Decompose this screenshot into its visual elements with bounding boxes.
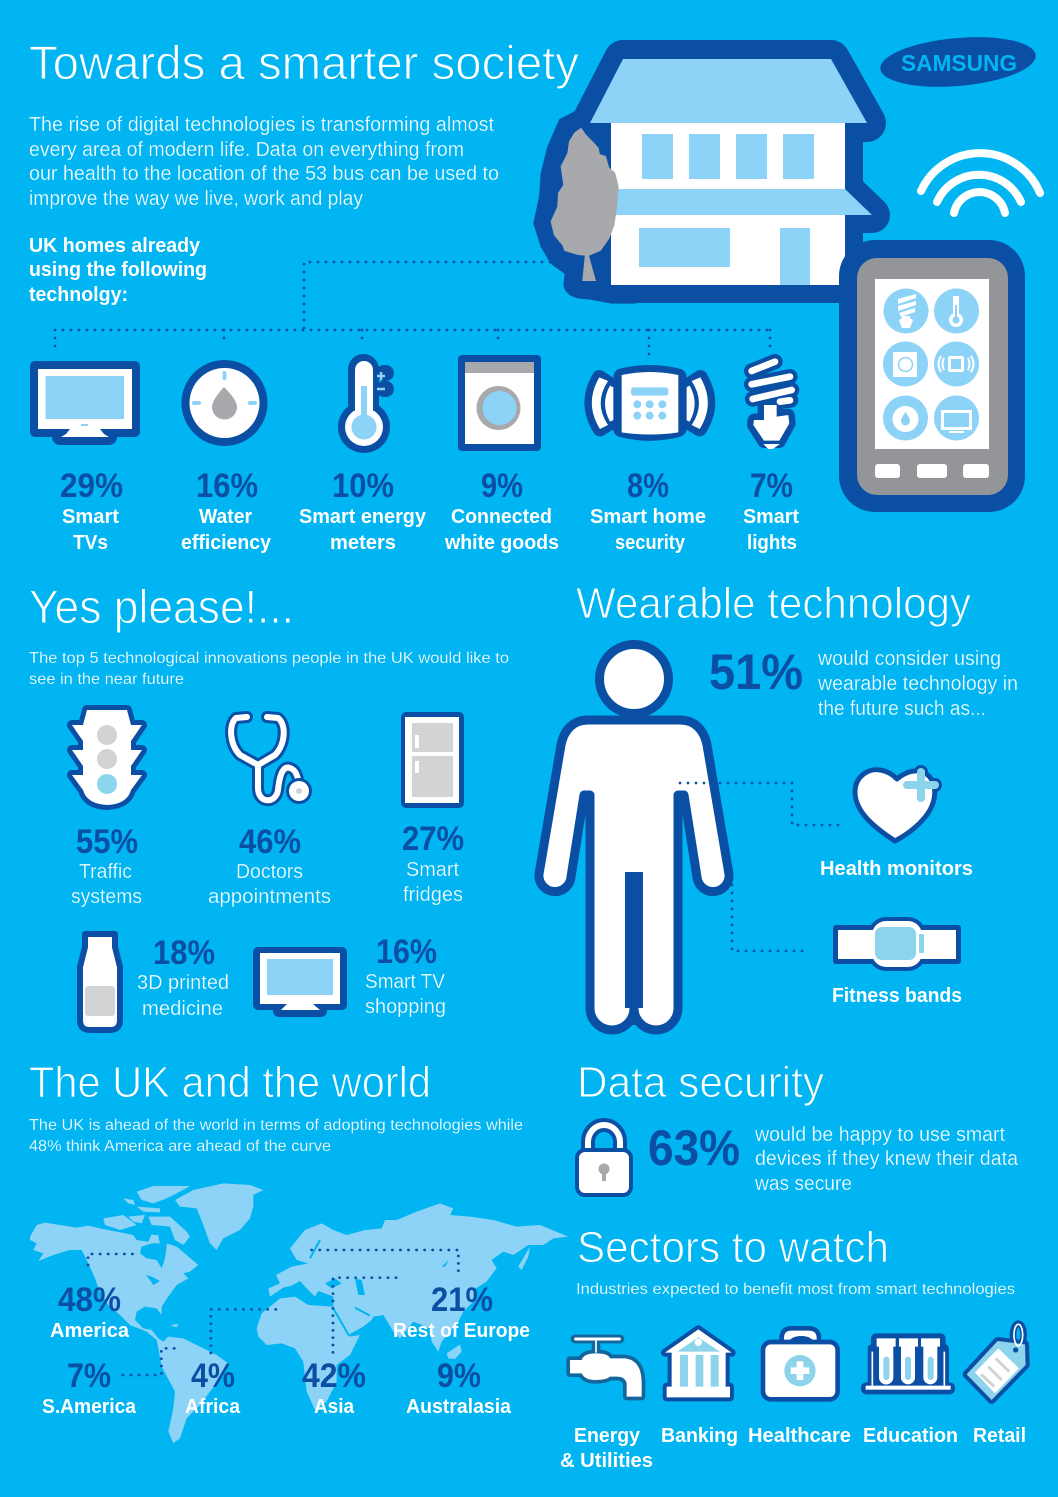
text: data security: was secure <box>754 1173 852 1195</box>
panel: Data security <box>577 1058 1019 1195</box>
logo: Samsung <box>878 31 1038 93</box>
stat: connected white goods: 9% <box>481 467 523 505</box>
stat: smart lights: lights <box>747 532 797 554</box>
stat: smart energy meters <box>299 467 427 554</box>
chart: world map <box>30 1183 568 1443</box>
stat: Australasia <box>406 1357 512 1418</box>
label: energy and utilities <box>560 1425 653 1472</box>
title: Towards a smarter society <box>29 36 579 89</box>
stat: Africa: Africa <box>185 1396 241 1418</box>
text: wearable consideration: would consider using <box>817 648 1001 670</box>
icon: traffic light <box>72 710 142 805</box>
panel: UK home technology <box>30 354 799 554</box>
heading: Data security <box>577 1058 824 1107</box>
intro text block: improve the way we live, work and play <box>29 188 363 210</box>
heading: Yes please!... <box>29 580 294 633</box>
intro text: The UK is ahead of the world in terms of adopting technologies while <box>29 1117 523 1134</box>
text: wearable consideration: wearable technology in <box>817 673 1018 695</box>
intro text block: The rise of digital technologies is transforming almost <box>29 114 494 136</box>
stat: smart home security: 8% <box>627 467 669 505</box>
intro text: Industries expected to benefit most from smart technologies <box>576 1281 1015 1298</box>
panel: Yes please <box>29 580 509 1030</box>
label: retail: Retail <box>973 1425 1026 1447</box>
text: wearable consideration <box>817 648 1018 720</box>
subheading: UK homes: using the following <box>29 259 207 281</box>
label: healthcare: Healthcare <box>748 1425 851 1447</box>
icon: test tubes <box>861 1333 955 1394</box>
stat: smart TV shopping: 16% <box>376 933 437 971</box>
icon: padlock <box>577 1125 631 1195</box>
subheading: UK homes: technolgy: <box>29 284 128 306</box>
icon: stethoscope <box>231 717 312 804</box>
intro text block <box>29 114 499 210</box>
stat: 3D printed medicine <box>137 934 229 1020</box>
icon: house with tree <box>534 59 872 303</box>
label: fitness bands: Fitness bands <box>832 985 962 1007</box>
intro text block: our health to the location of the 53 bus can be used to <box>29 163 499 185</box>
stat: Asia <box>302 1357 366 1418</box>
connector: dotted lines to wearables <box>680 783 840 951</box>
stat: South America <box>42 1357 137 1418</box>
stat: smart home security: Smart home <box>590 506 706 528</box>
stat: connected white goods <box>444 467 559 554</box>
icon: thermometer <box>338 354 394 453</box>
stat: traffic systems <box>71 823 142 908</box>
icon: home security panel <box>592 365 708 441</box>
stat: connected white goods: Connected <box>451 506 552 528</box>
icon: medicine bottle <box>80 934 120 1030</box>
stat: traffic systems: Traffic <box>79 861 132 883</box>
stat: South America: 7% <box>67 1357 111 1395</box>
icon: smart fridge <box>401 712 464 808</box>
stat: 63 percent: 63% <box>648 1120 740 1176</box>
stat: America: America <box>50 1320 130 1342</box>
heading: The UK and the world <box>29 1058 431 1107</box>
intro text block: every area of modern life. Data on everything from <box>29 139 464 161</box>
text: data security: devices if they knew their data <box>755 1148 1019 1170</box>
stat: America: 48% <box>58 1281 121 1319</box>
icon: medical case <box>763 1328 838 1399</box>
stat: smart home security <box>590 467 706 554</box>
stat: smart fridges: Smart <box>406 859 459 881</box>
stat: smart fridges: 27% <box>402 820 464 858</box>
stat: smart TVs: Smart <box>62 506 119 528</box>
text: wearable consideration: the future such as... <box>818 698 986 720</box>
icon: retail tag <box>967 1324 1026 1400</box>
stat: smart energy meters: 10% <box>332 467 394 505</box>
stat: South America: S.America <box>42 1396 137 1418</box>
stat: smart energy meters: meters <box>330 532 396 554</box>
icon: fitness band <box>833 917 961 971</box>
stat: doctors appointments: Doctors <box>236 861 303 883</box>
stat: smart fridges <box>402 820 464 906</box>
stat: Africa <box>185 1357 241 1418</box>
stat: water efficiency <box>181 467 272 554</box>
icon: heart monitor <box>855 770 935 841</box>
intro text <box>29 1117 523 1155</box>
intro text <box>29 650 509 688</box>
stat: doctors appointments <box>208 823 331 908</box>
label: education: Education <box>863 1425 958 1447</box>
stat: traffic systems: systems <box>71 886 142 908</box>
logo: Samsung: SAMSUNG <box>901 50 1017 76</box>
heading: Wearable technology <box>576 579 971 628</box>
icon: water dial <box>182 360 268 446</box>
stat: Rest of Europe: Rest of Europe <box>393 1320 530 1342</box>
stat: water efficiency: 16% <box>196 467 258 505</box>
stat: doctors appointments: appointments <box>208 886 331 908</box>
panel: header <box>29 31 1040 512</box>
connector: map dotted lines <box>88 1250 458 1375</box>
stat: America <box>50 1281 130 1342</box>
icon: smart TV <box>30 361 140 445</box>
label: energy and utilities: & Utilities <box>560 1450 653 1472</box>
panel: Wearable technology <box>539 579 1018 1030</box>
panel: The UK and the world <box>29 1058 568 1443</box>
stat: smart TVs: TVs <box>73 532 108 554</box>
icon: wifi signal <box>921 153 1040 213</box>
stat: smart energy meters: Smart energy <box>299 506 427 528</box>
icon: bank <box>665 1329 732 1397</box>
stat: smart TVs: 29% <box>60 467 123 505</box>
stat: smart TV shopping <box>365 933 446 1018</box>
stat: smart TVs <box>60 467 123 554</box>
stat: Australasia: 9% <box>437 1357 481 1395</box>
stat: Asia: Asia <box>314 1396 355 1418</box>
stat: smart lights: Smart <box>743 506 799 528</box>
icon: washing machine <box>458 355 541 451</box>
label: energy and utilities: Energy <box>574 1425 641 1447</box>
stat: smart fridges: fridges <box>403 884 463 906</box>
icon: TV shopping <box>253 947 347 1017</box>
stat: 3D printed medicine: 3D printed <box>137 972 229 994</box>
stat: water efficiency: Water <box>199 506 252 528</box>
stat: 51 percent: 51% <box>709 644 803 700</box>
heading: Sectors to watch <box>577 1223 889 1272</box>
stat: smart TV shopping: shopping <box>365 996 446 1018</box>
icon: smart light bulb <box>752 362 792 449</box>
intro text: 48% think America are ahead of the curve <box>29 1138 331 1155</box>
subheading: UK homes <box>29 235 207 306</box>
icon: smartphone with app icons <box>839 240 1025 512</box>
icon: tap <box>570 1339 642 1397</box>
label: banking: Banking <box>661 1425 738 1447</box>
icon: human figure <box>539 644 729 1030</box>
stat: smart home security: security <box>615 532 686 554</box>
intro text: see in the near future <box>29 671 184 688</box>
stat: Rest of Europe <box>393 1281 530 1342</box>
stat: smart lights <box>743 467 799 554</box>
text: data security: would be happy to use smart <box>754 1124 1005 1146</box>
stat: Australasia: Australasia <box>406 1396 512 1418</box>
stat: 3D printed medicine: 18% <box>153 934 215 972</box>
stat: Rest of Europe: 21% <box>431 1281 493 1319</box>
stat: smart TV shopping: Smart TV <box>365 971 446 993</box>
connector: dotted lines from house to icons <box>55 262 770 356</box>
stat: connected white goods: white goods <box>444 532 559 554</box>
stat: Asia: 42% <box>302 1357 366 1395</box>
stat: traffic systems: 55% <box>76 823 138 861</box>
stat: smart lights: 7% <box>750 467 793 505</box>
stat: 3D printed medicine: medicine <box>142 998 223 1020</box>
stat: Africa: 4% <box>191 1357 235 1395</box>
text: data security <box>754 1124 1019 1195</box>
label: health monitors: Health monitors <box>820 858 973 880</box>
panel: Sectors to watch <box>560 1223 1026 1472</box>
stat: water efficiency: efficiency <box>181 532 272 554</box>
intro text: The top 5 technological innovations people in the UK would like to <box>29 650 509 667</box>
stat: doctors appointments: 46% <box>239 823 301 861</box>
subheading: UK homes: UK homes already <box>29 235 201 257</box>
